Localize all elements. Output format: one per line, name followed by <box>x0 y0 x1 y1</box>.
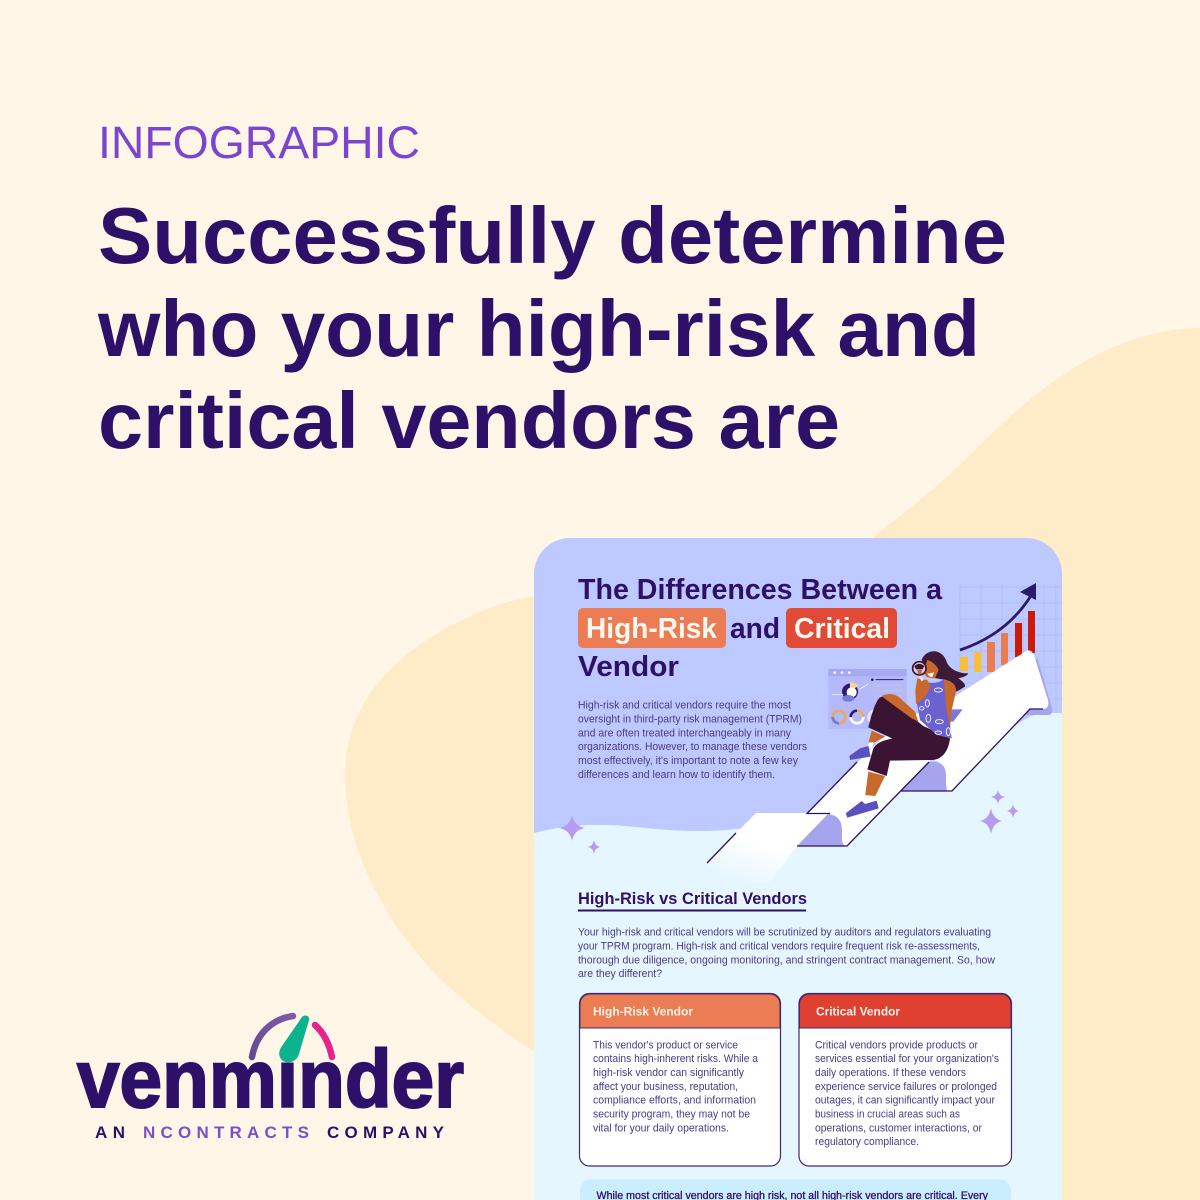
logo tagline: NCONTRACTS <box>143 1123 309 1142</box>
high-risk body text: contains high-inherent risks. While a <box>593 1053 758 1065</box>
title: who your high-risk and <box>97 284 980 373</box>
top <box>916 679 952 738</box>
critical body text <box>815 1039 999 1148</box>
lower arrow segment <box>712 813 828 878</box>
magnifying glass <box>913 662 926 681</box>
card intro text: most effectively, it's important to note a few key <box>578 755 799 767</box>
logo gauge icon <box>252 1016 332 1062</box>
illustration: dashboard panel <box>828 669 907 729</box>
pill: Critical: Critical <box>794 613 890 645</box>
hair back <box>922 651 968 692</box>
illustration: woman with magnifying glass <box>846 651 968 818</box>
background blob <box>345 328 1200 1200</box>
card intro text: organizations. However, to manage these vendors <box>578 741 807 753</box>
card top background <box>534 538 1062 833</box>
critical body text: outages, it can significantly impact your <box>815 1095 995 1107</box>
card intro text <box>578 700 807 781</box>
critical header <box>800 994 1011 1028</box>
high-risk body text <box>593 1039 758 1134</box>
lower shoe <box>846 801 879 818</box>
pill: High-Risk: High-Risk <box>586 613 718 645</box>
logo wordmark: venminder <box>77 1034 464 1125</box>
high-risk body text: compliance efforts, and information <box>593 1095 756 1107</box>
high-risk body text: affect your business, reputation, <box>593 1081 738 1093</box>
card intro text: and are often treated interchangeably in many <box>578 727 792 739</box>
critical body text: experience service failures or prolonged <box>815 1081 997 1093</box>
sparkles <box>559 790 1019 854</box>
critical body text: operations, customer interactions, or <box>815 1122 982 1134</box>
arrow head shadow <box>1025 657 1052 715</box>
back leg <box>868 696 950 741</box>
critical header: Critical Vendor <box>816 1005 900 1019</box>
bottom wave background <box>534 713 1062 1200</box>
illustration: zigzag arrow <box>707 650 1052 882</box>
card heading: Vendor <box>578 651 679 683</box>
logo: venminder <box>77 1016 464 1142</box>
section paragraph: are they different? <box>578 968 662 980</box>
panel: high-risk vendor <box>580 994 780 1166</box>
logo tagline: COMPANY <box>327 1123 445 1142</box>
section paragraph <box>578 927 995 980</box>
section paragraph: your TPRM program. High-risk and critical vendors require frequent risk re-assessments, <box>578 940 980 952</box>
section paragraph: thorough due diligence, ongoing monitoring, and stringent contract management. So, how <box>578 954 995 966</box>
high-risk body text: high-risk vendor can significantly <box>593 1067 745 1079</box>
high-risk body text: security program, they may not be <box>593 1109 750 1121</box>
arrow head <box>932 650 1048 791</box>
critical body text: daily operations. If these vendors <box>815 1067 966 1079</box>
card intro text: High-risk and critical vendors require the most <box>578 700 791 712</box>
middle step shadow <box>902 762 947 790</box>
title: Successfully determine <box>98 191 1007 280</box>
seat panel <box>950 709 962 722</box>
card heading: The Differences Between a <box>578 574 943 606</box>
title <box>97 191 1007 465</box>
card heading <box>578 574 943 683</box>
arms <box>944 679 956 728</box>
critical body text: regulatory compliance. <box>815 1136 919 1148</box>
title: critical vendors are <box>98 376 840 465</box>
high-risk header <box>580 994 780 1028</box>
high-risk body text: vital for your daily operations. <box>593 1122 729 1134</box>
critical body text: services essential for your organization's <box>815 1053 999 1065</box>
critical body text: Critical vendors provide products or <box>815 1039 978 1051</box>
middle arrow segment <box>808 712 930 846</box>
card heading: and <box>730 613 780 645</box>
chart: rising bars with arrow <box>958 583 1062 715</box>
upper shoe <box>849 746 871 760</box>
eyebrow label: INFOGRAPHIC <box>98 117 420 168</box>
section paragraph: Your high-risk and critical vendors will be scrutinized by auditors and regulators evaluating <box>578 927 991 939</box>
card intro text: oversight in third-party risk management (TPRM) <box>578 713 802 725</box>
lower sock <box>865 795 876 797</box>
upper shin <box>868 731 885 743</box>
critical body text: business in crucial areas such as <box>815 1109 960 1121</box>
lower step shadow <box>797 814 847 846</box>
lower shin <box>865 772 885 797</box>
high-risk header: High-Risk Vendor <box>593 1005 693 1019</box>
section heading: High-Risk vs Critical Vendors <box>578 889 807 908</box>
logo tagline <box>95 1123 445 1142</box>
front leg <box>867 736 950 776</box>
upper sock <box>868 742 873 749</box>
logo tagline: AN <box>95 1123 125 1142</box>
card intro text: differences and learn how to identify them. <box>578 769 775 781</box>
panel: critical vendor <box>799 994 1012 1166</box>
high-risk body text: This vendor's product or service <box>593 1039 738 1051</box>
face <box>923 660 939 678</box>
panel: infographic preview card <box>534 538 1062 1200</box>
callout <box>580 1179 1011 1200</box>
